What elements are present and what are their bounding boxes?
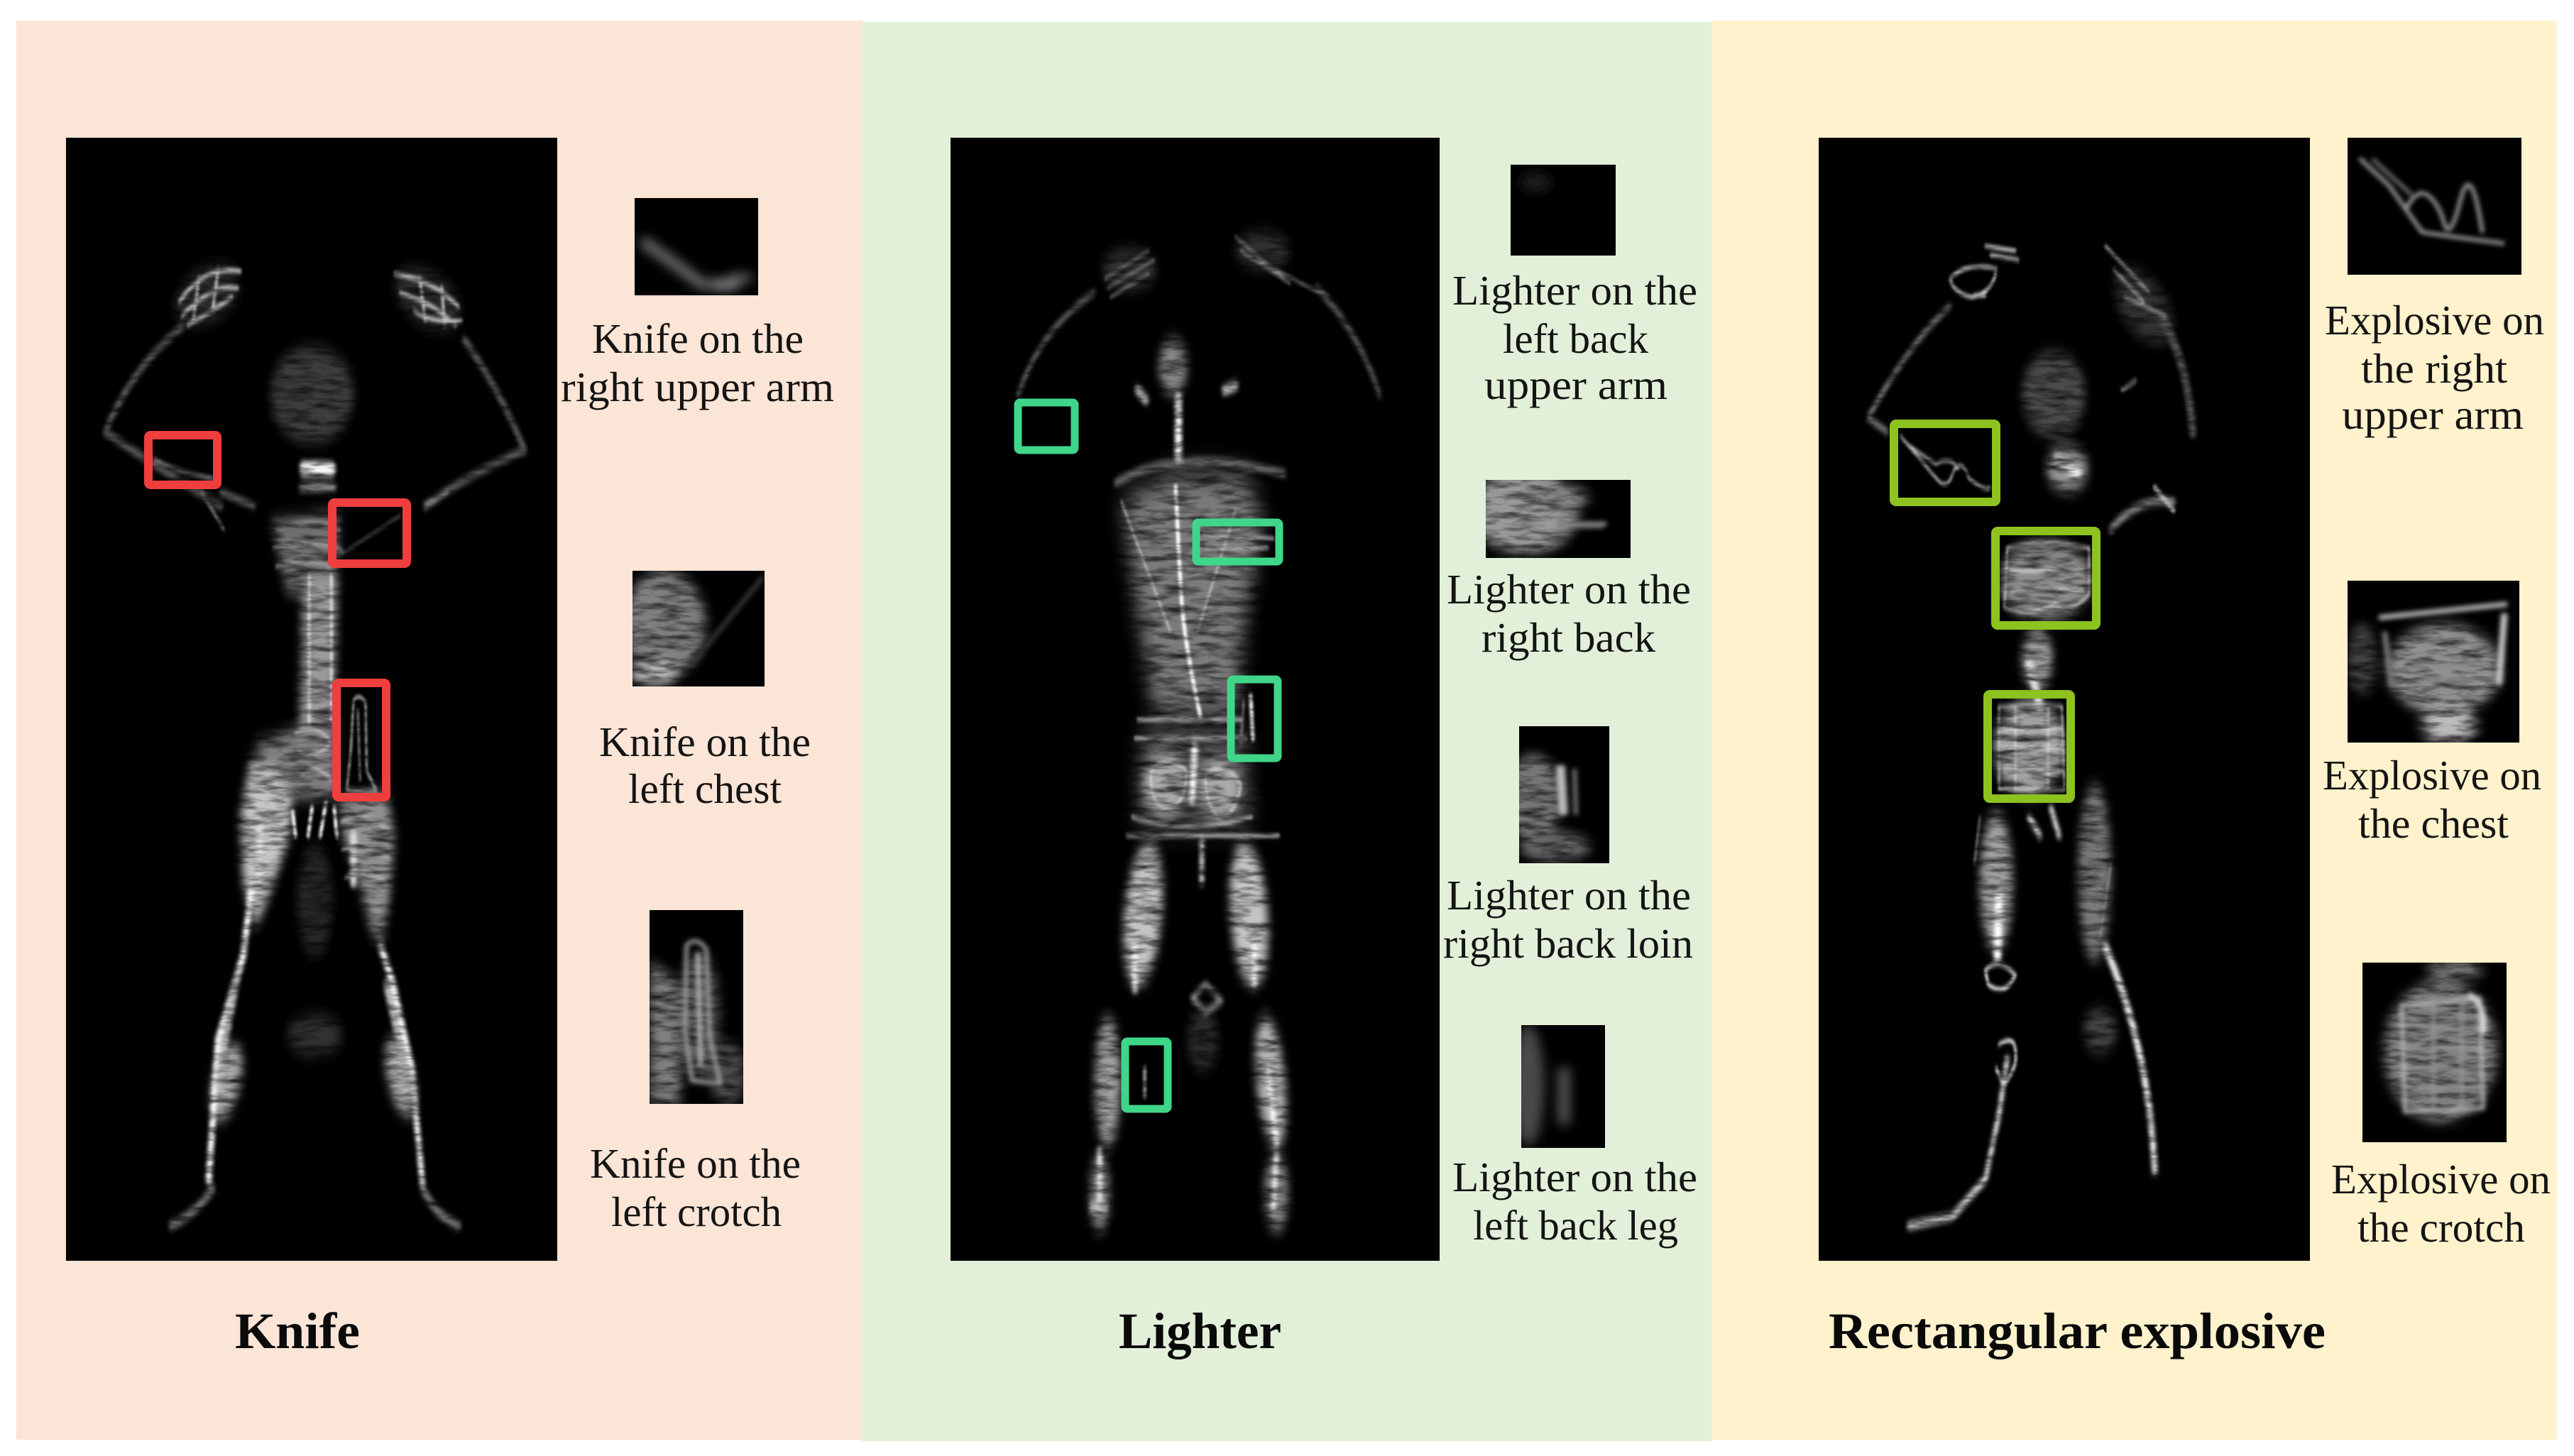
caption: knife left chest: left chest bbox=[628, 765, 782, 812]
caption: lighter left back upper arm: upper arm bbox=[1484, 361, 1667, 408]
caption: explosive crotch: Explosive on bbox=[2331, 1156, 2551, 1203]
caption: explosive crotch: the crotch bbox=[2357, 1204, 2525, 1251]
marker: explosive on chest bbox=[1995, 531, 2096, 625]
caption: explosive right upper arm: Explosive on bbox=[2325, 297, 2544, 344]
thumbnail: lighter right back bbox=[1486, 480, 1631, 558]
marker: knife on right upper arm bbox=[148, 435, 217, 485]
heading: Rectangular explosive: Rectangular explosive bbox=[1829, 1303, 2326, 1359]
thumbnail: knife left chest bbox=[632, 571, 765, 686]
caption: explosive chest: Explosive on bbox=[2323, 752, 2541, 799]
thumbnail: knife left crotch bbox=[650, 910, 743, 1104]
thumbnail: knife right upper arm bbox=[635, 198, 758, 295]
thumbnail: explosive right upper arm bbox=[2348, 138, 2521, 275]
thumbnail: explosive crotch bbox=[2362, 963, 2507, 1142]
heading: Lighter: Lighter bbox=[1119, 1303, 1281, 1359]
caption: knife left crotch: Knife on the bbox=[590, 1140, 801, 1187]
panel background bbox=[16, 21, 862, 1440]
caption: lighter left back leg: Lighter on the bbox=[1452, 1154, 1697, 1200]
caption: lighter left back upper arm: Lighter on the bbox=[1452, 267, 1697, 314]
panel: Lighter bbox=[862, 22, 1712, 1441]
caption: lighter right back loin: Lighter on the bbox=[1447, 872, 1691, 919]
caption: knife right upper arm: right upper arm bbox=[561, 363, 834, 410]
panel background bbox=[862, 22, 1712, 1441]
marker: explosive on right upper arm bbox=[1894, 424, 1996, 502]
caption: knife left crotch: left crotch bbox=[611, 1188, 782, 1235]
heading: Knife: Knife bbox=[235, 1303, 360, 1359]
marker: lighter on left back leg bbox=[1125, 1041, 1168, 1109]
marker: knife on left chest bbox=[332, 503, 407, 564]
panel: Rectangular explosive bbox=[1712, 21, 2557, 1440]
thumbnail: lighter right back loin bbox=[1519, 726, 1609, 863]
marker: lighter on left back upper arm bbox=[1018, 403, 1075, 450]
thumbnail: explosive chest bbox=[2348, 581, 2519, 743]
caption: explosive chest: the chest bbox=[2358, 800, 2509, 847]
panel: Knife bbox=[16, 21, 862, 1440]
caption: knife right upper arm: Knife on the bbox=[592, 315, 804, 362]
scan image: knife body scan bbox=[66, 138, 557, 1261]
panel background bbox=[1712, 21, 2557, 1440]
caption: explosive right upper arm: upper arm bbox=[2342, 391, 2524, 438]
marker: lighter on right back bbox=[1196, 522, 1279, 562]
caption: lighter right back: Lighter on the bbox=[1447, 566, 1691, 613]
caption: lighter right back loin: right back loin bbox=[1443, 920, 1693, 967]
caption: lighter left back leg: left back leg bbox=[1473, 1202, 1678, 1249]
caption: lighter right back: right back bbox=[1482, 614, 1656, 661]
marker: lighter on right back loin bbox=[1231, 679, 1278, 758]
marker: explosive on crotch bbox=[1988, 694, 2071, 799]
scan image: lighter body scan bbox=[951, 138, 1440, 1261]
marker: knife on left crotch bbox=[336, 683, 386, 797]
scan image: explosive body scan bbox=[1819, 138, 2310, 1261]
thumbnail: lighter left back upper arm bbox=[1511, 165, 1616, 256]
caption: knife left chest: Knife on the bbox=[599, 718, 811, 765]
thumbnail: lighter left back leg bbox=[1521, 1025, 1605, 1148]
caption: explosive right upper arm: the right bbox=[2361, 345, 2508, 392]
caption: lighter left back upper arm: left back bbox=[1503, 315, 1648, 362]
